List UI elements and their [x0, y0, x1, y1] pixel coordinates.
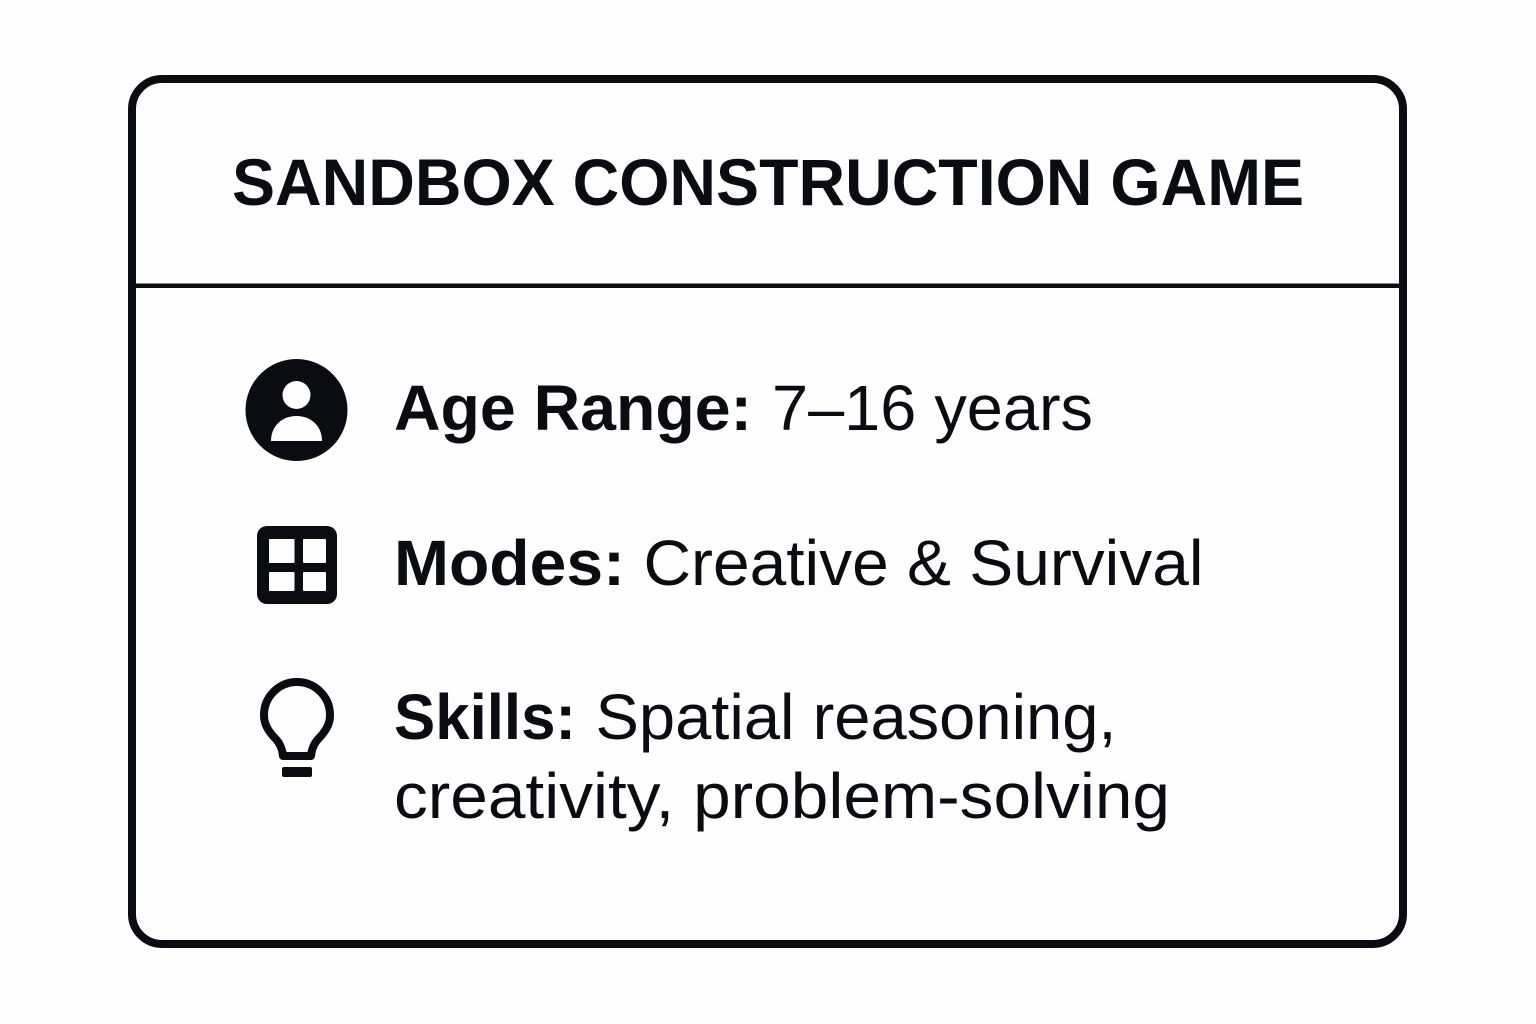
- title: SANDBOX CONSTRUCTION GAME: [232, 145, 1304, 219]
- text: skills: creativity, problem-solving: [394, 760, 1170, 832]
- text: skills: [394, 681, 1170, 832]
- icon: light bulb: [264, 682, 330, 777]
- text: modes: Modes:: [394, 527, 625, 599]
- row: age range: [246, 359, 1093, 461]
- text: age range: 7–16 years: [772, 372, 1093, 444]
- text: age range: [394, 372, 1093, 444]
- icon: four-pane grid: [257, 526, 337, 604]
- row: modes: [257, 526, 1204, 604]
- row: skills: [264, 681, 1170, 832]
- text: skills: Spatial reasoning,: [596, 681, 1116, 753]
- icon: person in circle: [246, 359, 348, 461]
- text: age range: Age Range:: [394, 372, 752, 444]
- text: skills: Skills:: [394, 681, 576, 753]
- panel: card outline: [132, 79, 1403, 944]
- text: modes: Creative & Survival: [644, 527, 1204, 599]
- text: modes: [394, 527, 1204, 599]
